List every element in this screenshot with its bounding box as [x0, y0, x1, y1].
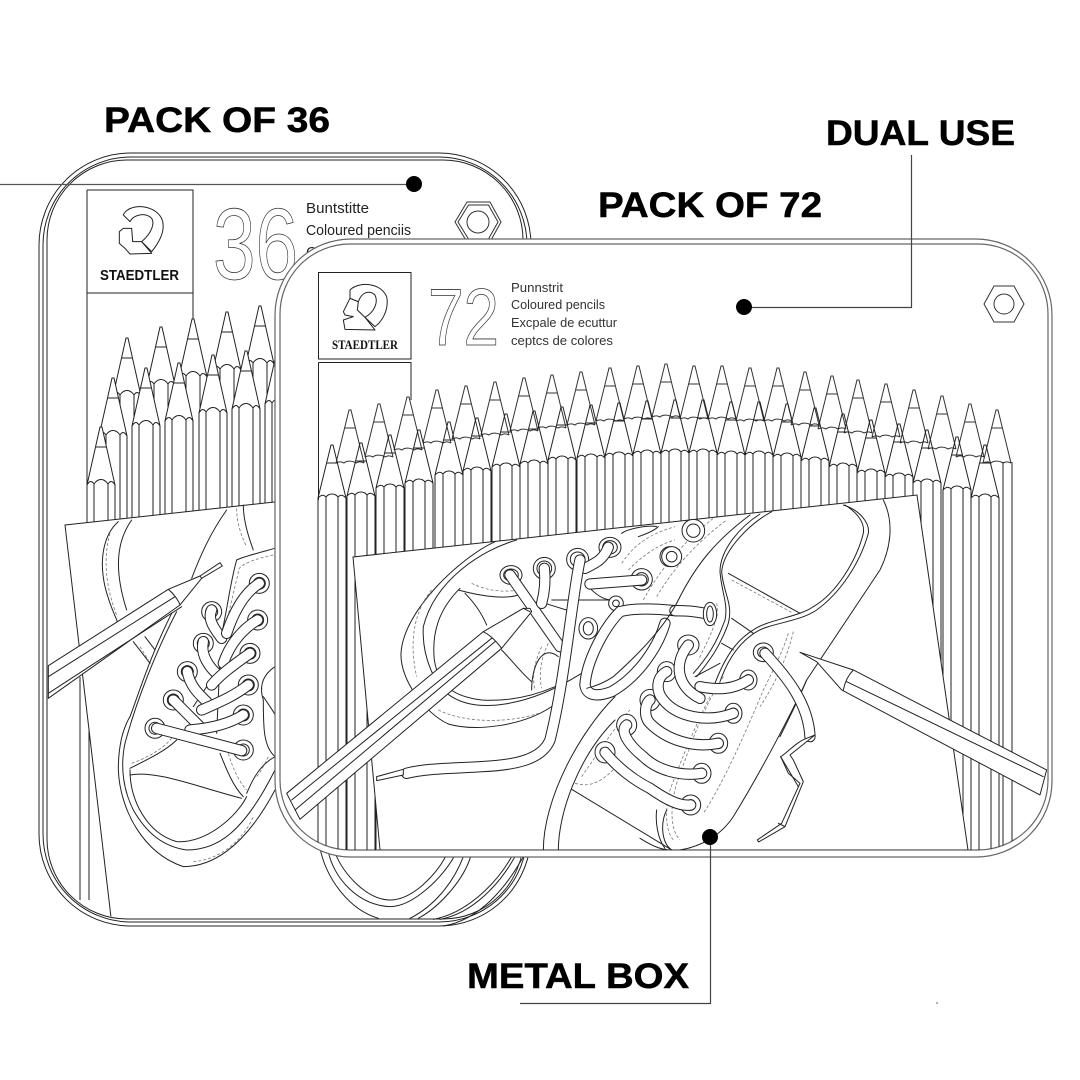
panel: pack of 36 metal box: [38, 152, 532, 926]
sneaker illustration: left shoe: [377, 526, 712, 781]
heading: pack of 36: PACK OF 36: [104, 101, 330, 140]
heading: pack of 72: PACK OF 72: [598, 186, 822, 225]
heading: dual use: DUAL USE: [826, 114, 1015, 153]
callout: dual use leader: [736, 155, 912, 315]
number 72: 72: [428, 273, 499, 363]
pencil: 36 pack: [48, 563, 222, 698]
hex nut: [455, 202, 501, 242]
panel: pack of 72 metal box: [275, 239, 1052, 915]
pencil: right: [800, 652, 1047, 795]
pack 36 label text: Coloured penciis: [306, 222, 411, 239]
pack 36 label text: Buntstitte: [306, 200, 369, 217]
pack 36 label text: Cr: [306, 244, 322, 261]
pack 36 label text: [306, 200, 411, 261]
pack 72 label text: [511, 281, 617, 348]
pencil: left: [287, 608, 532, 819]
callout: pack of 36 leader: [0, 176, 422, 192]
pack 72 label text: Coloured pencils: [511, 298, 605, 312]
stray speck: [936, 1002, 938, 1004]
pack 72 label text: Excpale de ecuttur: [511, 316, 617, 330]
pack 72 label text: ceptcs de colores: [511, 334, 613, 348]
sneaker illustration: 36 pack: [102, 505, 276, 867]
pencils: 36 pack: [48, 306, 520, 916]
drawing paper: 36 pack: [64, 502, 520, 916]
number 36: 36: [213, 189, 298, 301]
logo box: Staedtler: STAEDTLER: [332, 337, 399, 352]
pencils: 72 pack: [286, 364, 1048, 850]
pack 72 label text: Punnstrit: [511, 281, 564, 295]
tin outline: [39, 153, 531, 926]
heading: metal box: METAL BOX: [467, 957, 690, 996]
logo box: Staedtler: [87, 190, 193, 525]
tin outline: [275, 239, 1052, 857]
logo box: Staedtler: STAEDTLER: [100, 268, 179, 284]
hex nut: [984, 286, 1024, 322]
callout: metal box leader: [520, 829, 718, 1004]
drawing paper: 72 pack: [353, 495, 968, 850]
back shoe heel below the front tin: [320, 848, 523, 926]
sneaker illustration: right shoe: [543, 500, 890, 850]
logo box: Staedtler: [318, 272, 411, 500]
